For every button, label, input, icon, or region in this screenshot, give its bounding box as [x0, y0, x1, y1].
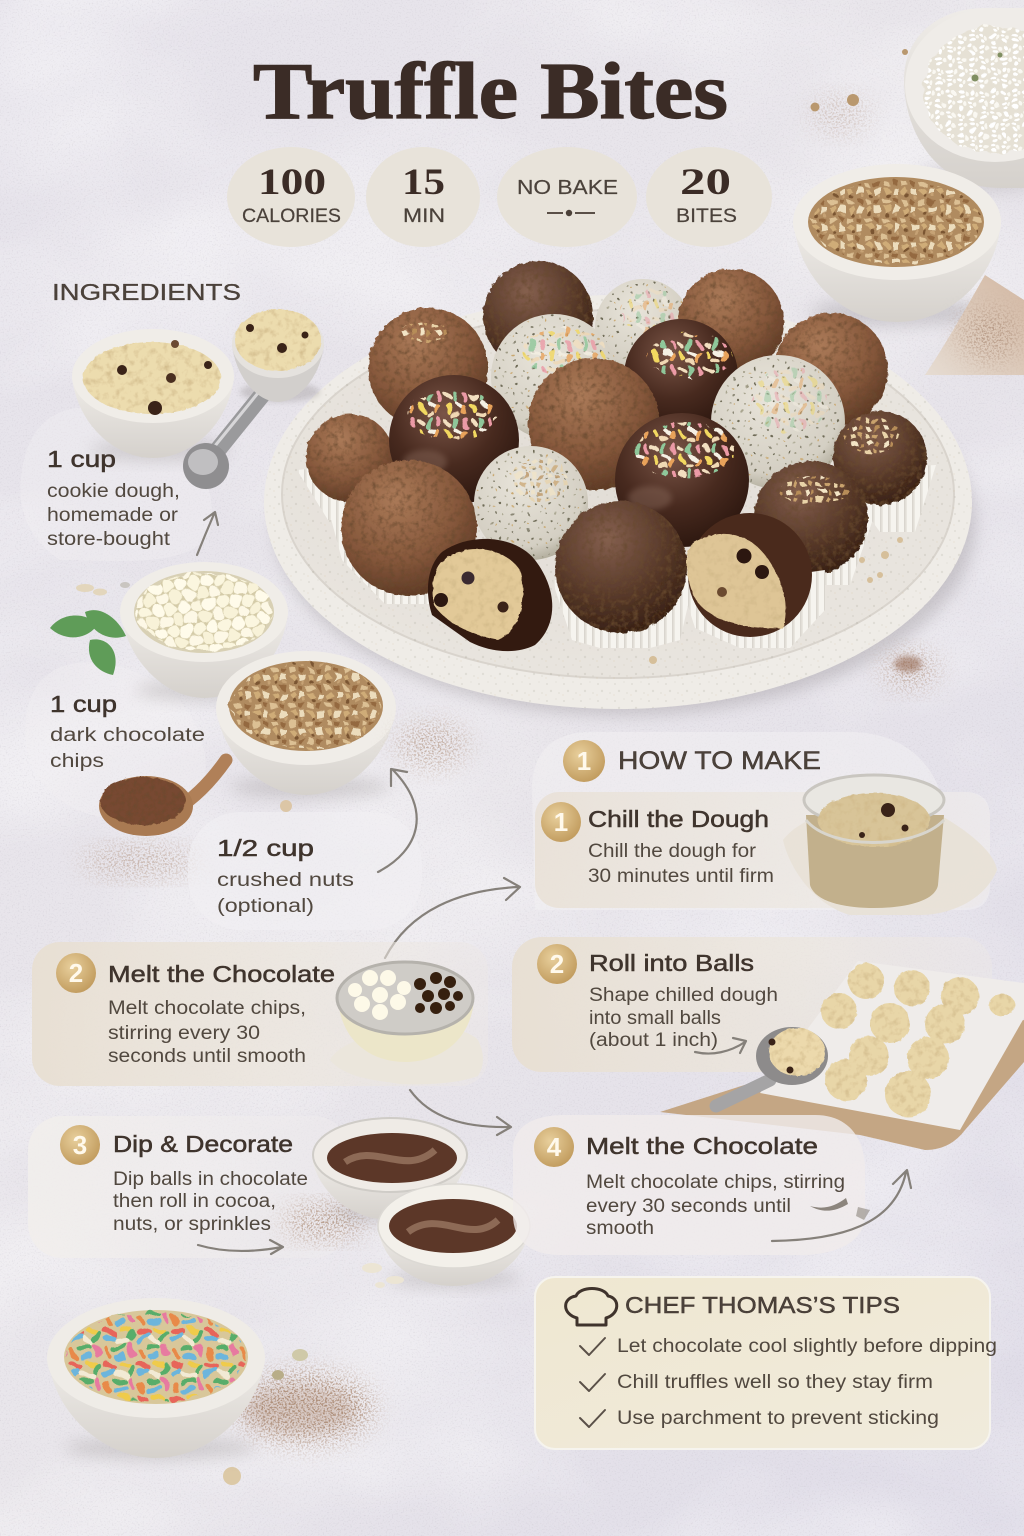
text: cookie dough: cookie dough,: [47, 481, 180, 502]
text: cookie dough: 1 cup: [47, 446, 116, 472]
step: chill the dough: 1: [554, 807, 568, 837]
panel: crushed nuts ingredient: (optional): [217, 896, 314, 917]
stat: 100 calories: 100: [258, 162, 326, 203]
stat: no bake: [497, 147, 637, 247]
panel: step 2 roll into balls: into small balls: [589, 1008, 721, 1029]
panel: step 2 roll into balls: Roll into Balls: [589, 950, 754, 976]
bowl: rice, top right: [904, 8, 1024, 192]
bowl: sprinkles: [47, 1298, 265, 1459]
icon: jar of dough: [783, 775, 997, 915]
panel: step 4 melt the chocolate: 4: [547, 1132, 562, 1162]
step: chill the dough: Chill the Dough: [588, 806, 769, 832]
arrow: [197, 512, 218, 555]
panel: chocolate chips ingredient: [25, 562, 396, 836]
icon: white chocolate chip bowl: [120, 562, 288, 700]
panel: cookie dough ingredient: [20, 309, 324, 561]
crumbs below bowls: [362, 1263, 404, 1288]
swoosh marks: [810, 1198, 870, 1220]
panel: step 3 dip and decorate: 3: [73, 1130, 87, 1160]
crumbs near mint: [76, 582, 130, 596]
heading: how to make: 1: [577, 746, 591, 776]
panel: crushed nuts ingredient: 1/2 cup: [217, 835, 314, 861]
heading: how to make: HOW TO MAKE: [618, 747, 821, 775]
arrow: step 2 to step 4: [410, 1090, 511, 1135]
text: cookie dough: store-bought: [47, 529, 171, 550]
stat: 20 bites: 20: [680, 162, 731, 203]
panel: step 4 melt the chocolate: Melt chocolate chips, stirring: [586, 1172, 845, 1193]
tip 1: Let chocolate cool slightly before dipping: [617, 1336, 997, 1357]
text: cookie dough: homemade or: [47, 505, 179, 526]
stat badges: [227, 147, 772, 247]
panel: crushed nuts ingredient: [188, 812, 422, 930]
middle row truffles: [297, 355, 936, 547]
arrow: to scoop: [695, 1038, 746, 1054]
panel: step 2 roll into balls: 2: [550, 949, 564, 979]
crumbs on plate edge: [649, 537, 903, 664]
stat: 20 bites: BITES: [676, 206, 737, 227]
panel: step 4 melt the chocolate: Melt the Chocolate: [586, 1133, 818, 1159]
step: chill the dough: [535, 775, 997, 915]
panel: step 2 melt the chocolate: seconds until smooth: [108, 1046, 306, 1067]
bitten truffle left: [428, 539, 552, 651]
arrow: step 4 upward: [772, 1170, 911, 1241]
icon: wooden spoon with cocoa: [99, 760, 226, 836]
panel: step 2 roll into balls: (about 1 inch): [589, 1030, 718, 1051]
panel: how to make: [532, 732, 997, 915]
text: chocolate chips: chips: [50, 751, 104, 772]
plate: [264, 295, 975, 715]
text: chocolate chips: dark chocolate: [50, 725, 205, 746]
panel: step 3 dip and decorate: then roll in cocoa,: [113, 1191, 276, 1212]
icon: dough bowl: [72, 329, 234, 460]
panel: step 3 dip and decorate: nuts, or sprinkles: [113, 1214, 271, 1235]
panel: step 3 dip and decorate: Dip balls in chocolate: [113, 1169, 308, 1190]
panel: chef tips: [535, 1277, 997, 1449]
scatter crumbs, top: [810, 49, 908, 133]
tip 2: Chill truffles well so they stay firm: [617, 1372, 933, 1393]
panel: step 2 melt the chocolate: Melt the Chocolate: [108, 961, 335, 987]
stat: 100 calories: CALORIES: [242, 206, 341, 227]
panel: step 2 melt the chocolate: stirring every 30: [108, 1023, 260, 1044]
cocoa dust pile: [223, 1349, 375, 1485]
stat: 20 bites: [646, 147, 772, 247]
step: chill the dough: Chill the dough for: [588, 841, 757, 862]
text: chocolate chips: [50, 691, 205, 772]
cocoa on parchment corner: [925, 275, 1024, 375]
stat: no bake: NO BAKE: [517, 177, 618, 199]
stat: 100 calories: [227, 147, 355, 247]
panel: step 2 roll into balls: [512, 937, 1024, 1150]
panel: step 4 melt the chocolate: [513, 1115, 870, 1255]
heading: how to make: [563, 740, 821, 782]
stat: 15 min: MIN: [403, 206, 445, 227]
icon: glass bowl of chips: [330, 962, 483, 1084]
arrow: dip to dust: [198, 1240, 283, 1254]
step: chill the dough: 30 minutes until firm: [588, 866, 774, 887]
panel: step 4 melt the chocolate: smooth: [586, 1218, 654, 1239]
bowl: crushed nuts, top right: [793, 164, 1001, 325]
cocoa dust near bowls: [283, 1206, 367, 1238]
panel: step 2 melt the chocolate: 2: [69, 958, 83, 988]
stat: 15 min: 15: [402, 162, 445, 203]
panel: crushed nuts ingredient: crushed nuts: [217, 870, 354, 891]
text: cookie dough: [47, 446, 180, 550]
heading: ingredients: INGREDIENTS: [52, 279, 241, 305]
icon: mint leaves: [50, 610, 126, 675]
arrow: nuts to bowl: [378, 769, 417, 872]
icon: chocolate bowls: [312, 1118, 530, 1287]
title: Truffle Bites: [253, 48, 728, 136]
panel: step 2 roll into balls: Shape chilled dough: [589, 985, 778, 1006]
arrow: step 2 to how-to panel: [385, 878, 520, 958]
icon: tray of dough balls: [660, 961, 1024, 1150]
panel: step 3 dip and decorate: [28, 1116, 530, 1288]
front row truffles in paper cups: [330, 446, 878, 651]
icon: chef hat: [566, 1288, 617, 1325]
panel: step 2 melt the chocolate: Melt chocolate chips,: [108, 998, 306, 1019]
bitten truffle right: [687, 513, 812, 637]
plate of truffles: [264, 261, 975, 715]
cocoa dust by spoon: [80, 723, 468, 876]
back row truffles: [368, 261, 888, 440]
panel: step 2 melt the chocolate: [32, 942, 488, 1086]
text: chocolate chips: 1 cup: [50, 691, 117, 717]
tip 3: Use parchment to prevent sticking: [617, 1408, 939, 1429]
icon: dough scoop on tray: [716, 1027, 828, 1106]
panel: step 3 dip and decorate: Dip & Decorate: [113, 1131, 293, 1157]
stat: 15 min: [366, 147, 480, 247]
icon: dough scoop: [183, 309, 324, 489]
icon: crushed nuts bowl: [216, 651, 396, 797]
panel: step 4 melt the chocolate: every 30 seconds until: [586, 1196, 791, 1217]
cocoa dust right of plate: [882, 652, 938, 688]
heading: tips: CHEF THOMAS’S TIPS: [625, 1292, 900, 1318]
